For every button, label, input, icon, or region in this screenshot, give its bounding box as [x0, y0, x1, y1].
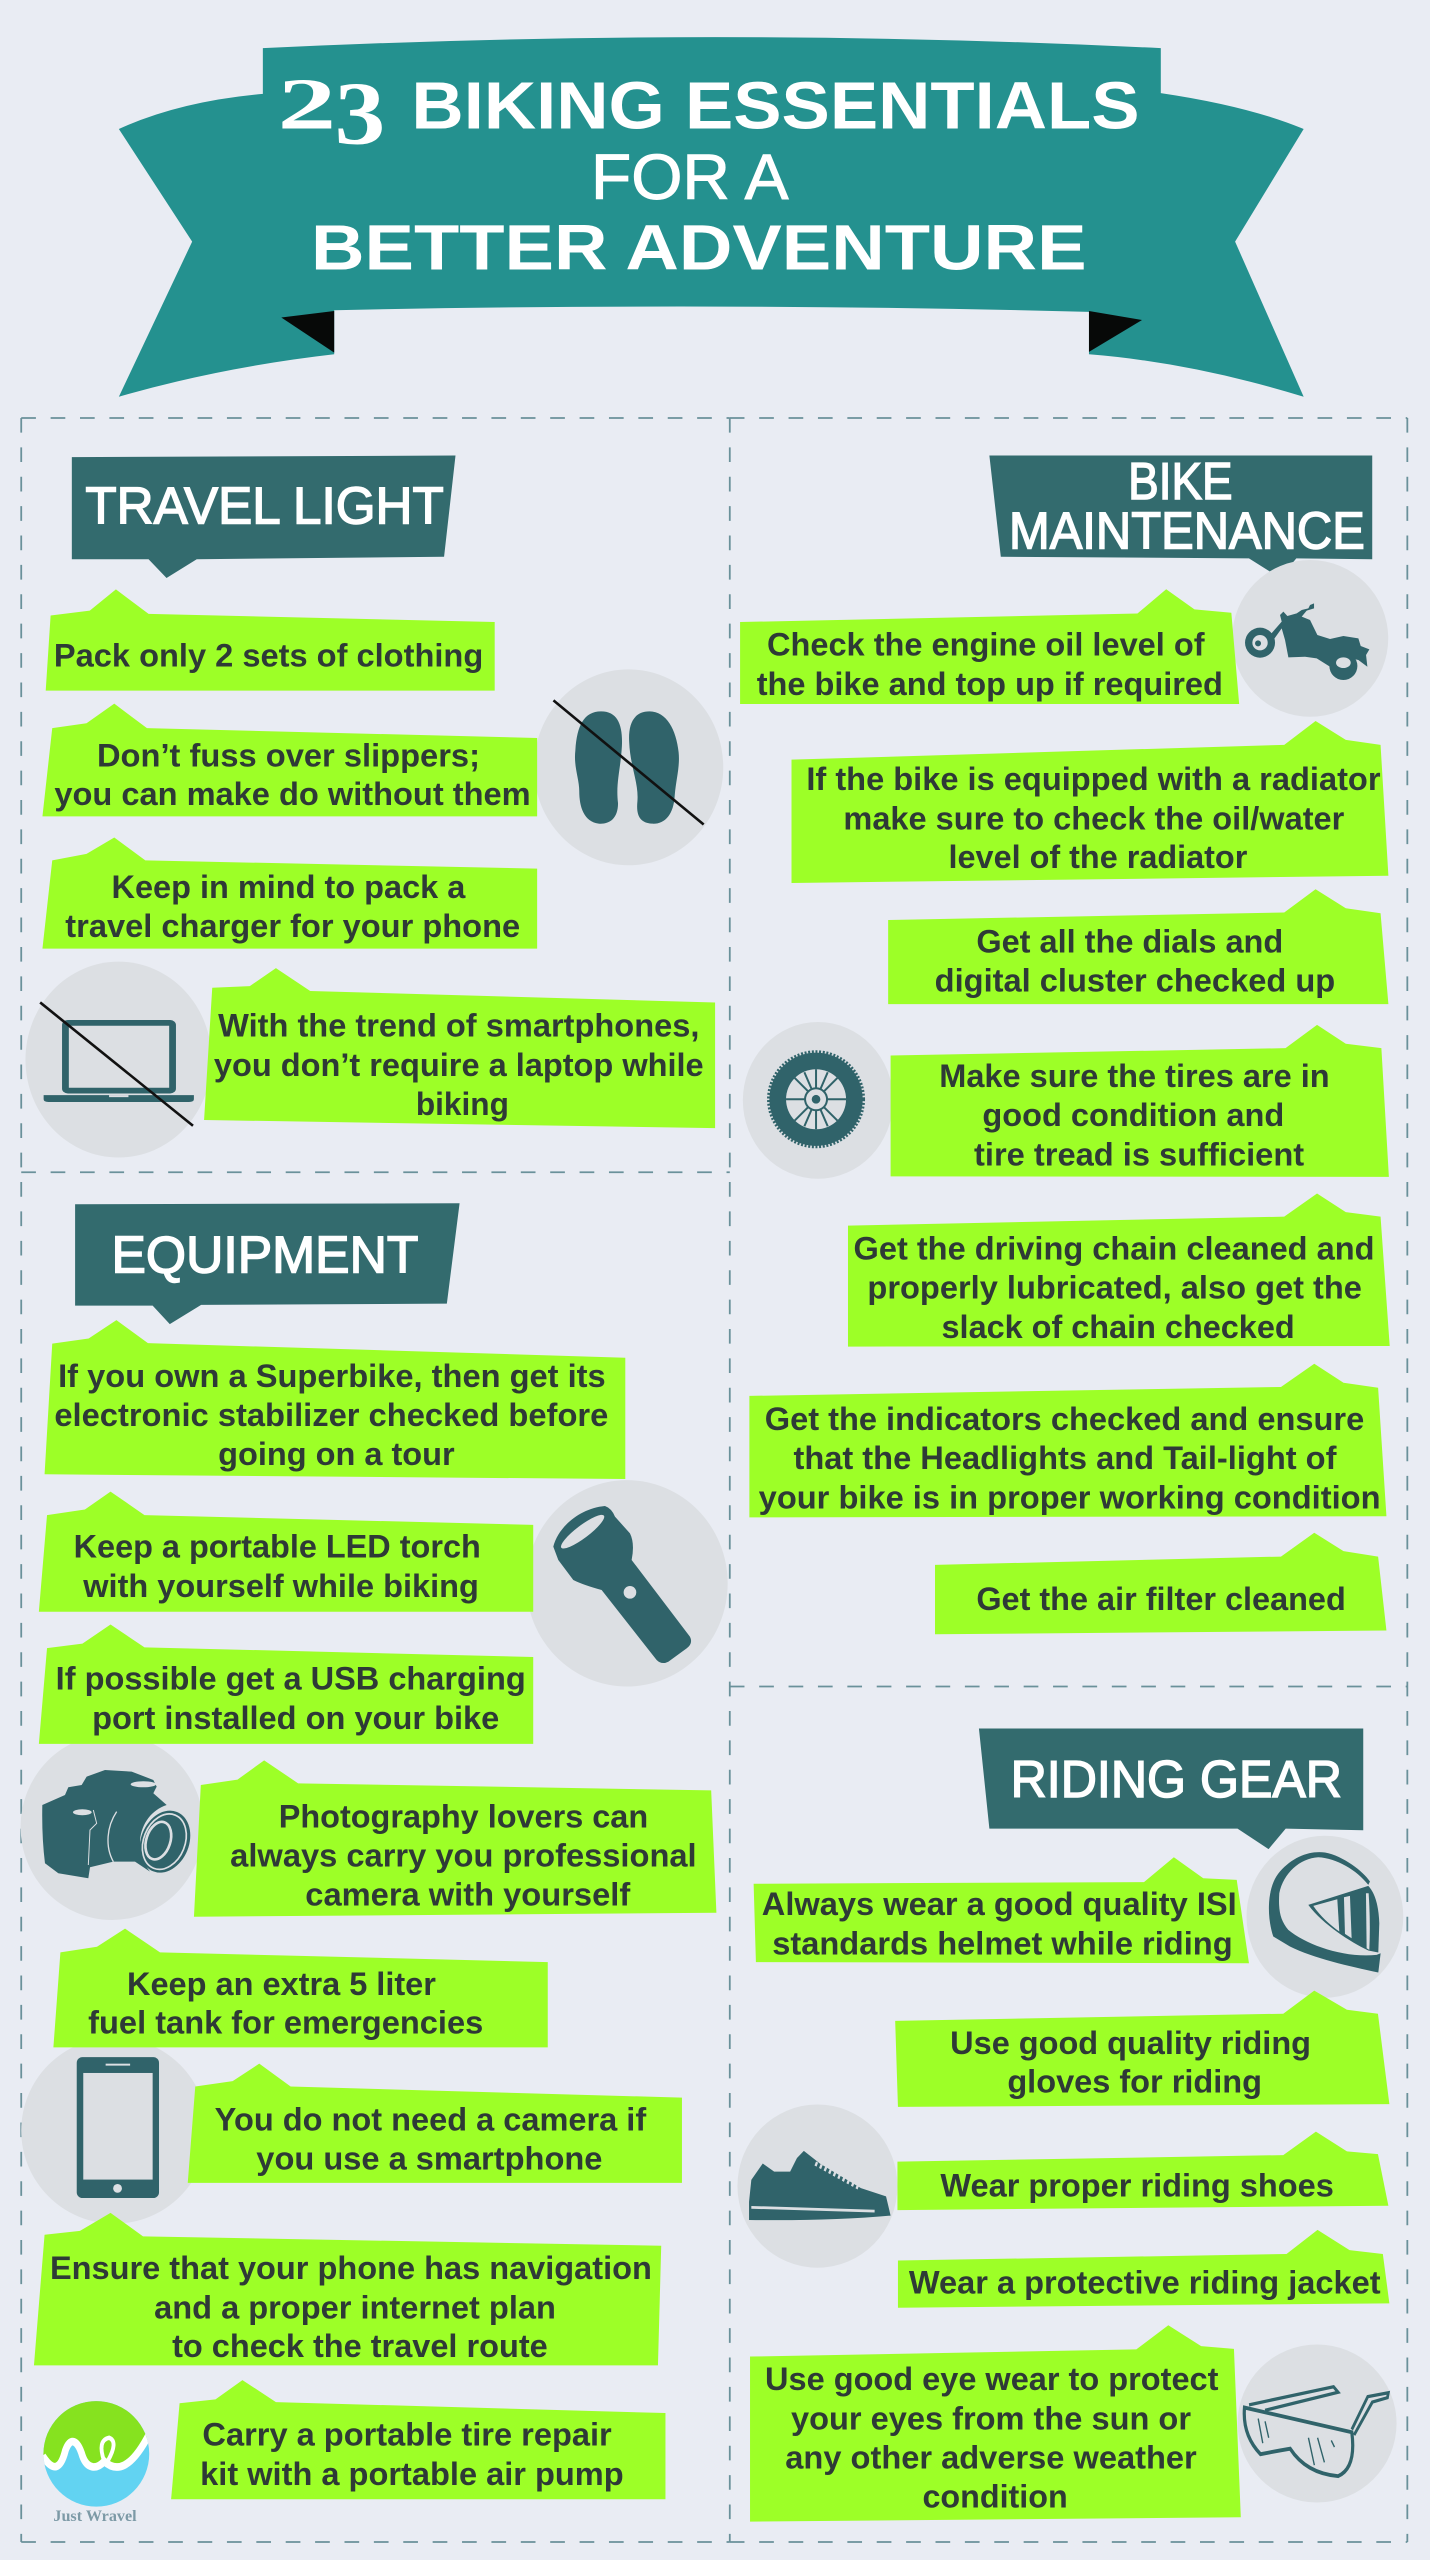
title text [278, 64, 1140, 283]
heading: riding gear [979, 1728, 1363, 1849]
item: fuel tank: fuel tank for emergencies [88, 2004, 483, 2040]
ribbon fold left [281, 311, 334, 353]
item: fuel tank: Keep an extra 5 liter [127, 1966, 436, 2002]
item: tires [891, 1025, 1389, 1177]
item: travel charger: Keep in mind to pack a [112, 869, 466, 905]
item: eye wear: your eyes from the sun or [791, 2400, 1191, 2436]
item: laptop: you don’t require a laptop while [214, 1047, 704, 1083]
item: dials: digital cluster checked up [935, 963, 1335, 999]
item: no camera needed [188, 2064, 682, 2183]
item: superbike: going on a tour [218, 1436, 455, 1472]
item: eye wear [750, 2325, 1241, 2522]
item: radiator [792, 721, 1388, 883]
title text: FOR A [591, 142, 789, 213]
item: eye wear: condition [922, 2479, 1068, 2515]
item: eye wear: any other adverse weather [785, 2440, 1197, 2476]
item: engine oil [740, 589, 1239, 704]
item: travel charger [42, 838, 537, 949]
heading: equipment: EQUIPMENT [112, 1226, 418, 1284]
icon: crossed-out laptop [25, 962, 212, 1158]
item: tire repair kit [171, 2380, 665, 2499]
icon: helmet [1247, 1836, 1403, 1998]
item: USB port [39, 1624, 533, 1744]
heading: travel light [72, 456, 456, 578]
item: chain: slack of chain checked [942, 1309, 1295, 1345]
item: jacket [898, 2230, 1389, 2308]
item: USB port: If possible get a USB charging [56, 1660, 526, 1696]
item: slippers [42, 704, 537, 816]
icon: goggles [1238, 2344, 1397, 2503]
item: travel charger: travel charger for your phone [65, 908, 520, 944]
banner ribbon [119, 37, 1304, 397]
item: navigation: to check the travel route [172, 2328, 548, 2364]
item: radiator: make sure to check the oil/water [843, 800, 1345, 836]
ribbon fold right [1089, 311, 1142, 352]
title text: 2 [278, 64, 336, 145]
panel: travel light [25, 456, 723, 1158]
item: navigation: Ensure that your phone has navigation [50, 2250, 652, 2286]
item: helmet [754, 1857, 1249, 1963]
item: tires: good condition and [982, 1097, 1284, 1133]
item: helmet: standards helmet while riding [772, 1925, 1233, 1961]
heading: bike maintenance [989, 453, 1372, 578]
item: chain [848, 1193, 1390, 1347]
item: dials: Get all the dials and [976, 923, 1283, 959]
item: USB port: port installed on your bike [92, 1700, 499, 1736]
heading: travel light: TRAVEL LIGHT [85, 477, 444, 535]
item: indicators: your bike is in proper working condition [759, 1479, 1381, 1515]
item: laptop: With the trend of smartphones, [218, 1008, 699, 1044]
panel: bike maintenance [740, 453, 1390, 1634]
heading: equipment [75, 1203, 460, 1324]
item: superbike: electronic stabilizer checked before [54, 1397, 608, 1433]
title text: BETTER ADVENTURE [311, 212, 1087, 283]
item: tires: tire tread is sufficient [974, 1137, 1304, 1173]
icon: shoe [737, 2104, 897, 2268]
item: laptop [204, 968, 715, 1128]
item: gloves: Use good quality riding [950, 2025, 1311, 2061]
panel: equipment [21, 1203, 728, 2525]
item: air filter [935, 1533, 1386, 1634]
item: LED torch [39, 1492, 533, 1612]
icon: wheel [743, 1022, 893, 1179]
icon: motorcycle [1232, 560, 1388, 717]
item: shoes [897, 2132, 1388, 2210]
item: dials [888, 889, 1388, 1004]
item: tire repair kit: Carry a portable tire repair [202, 2417, 612, 2453]
heading: bike maintenance: MAINTENANCE [1009, 503, 1365, 561]
item: tires: Make sure the tires are in [939, 1058, 1330, 1094]
item: gloves [895, 1991, 1389, 2107]
item: slippers: Don’t fuss over slippers; [97, 738, 480, 774]
item: shoes: Wear proper riding shoes [940, 2167, 1334, 2203]
item: photography: Photography lovers can [279, 1799, 648, 1835]
title banner [119, 37, 1304, 397]
item: LED torch: Keep a portable LED torch [74, 1528, 481, 1564]
item: engine oil: Check the engine oil level of [767, 627, 1205, 663]
item: indicators: Get the indicators checked and ensure [765, 1401, 1364, 1437]
item: chain: properly lubricated, also get the [867, 1269, 1362, 1305]
heading: riding gear: RIDING GEAR [1011, 1751, 1342, 1809]
logo: Just Wravel: Just Wravel [53, 2508, 137, 2525]
item: fuel tank [53, 1929, 548, 2047]
item: navigation [34, 2213, 661, 2365]
item: indicators [749, 1364, 1386, 1517]
icon: camera [21, 1734, 203, 1920]
title text: 3 [335, 65, 385, 164]
item: superbike: If you own a Superbike, then get its [58, 1358, 606, 1394]
item: radiator: If the bike is equipped with a radiator [806, 761, 1381, 797]
item: navigation: and a proper internet plan [154, 2290, 556, 2326]
item: superbike [45, 1320, 625, 1479]
item: air filter: Get the air filter cleaned [976, 1581, 1346, 1617]
item: engine oil: the bike and top up if required [757, 666, 1223, 702]
item: helmet: Always wear a good quality ISI [762, 1886, 1237, 1922]
item: jacket: Wear a protective riding jacket [909, 2265, 1381, 2301]
icon: crossed-out slippers [534, 669, 723, 865]
item: gloves: gloves for riding [1007, 2064, 1262, 2100]
item: clothing [46, 589, 495, 691]
icon: torch [526, 1480, 728, 1687]
heading: bike maintenance: BIKE [1128, 453, 1233, 511]
item: photography: camera with yourself [305, 1877, 630, 1913]
item: photography: always carry you professional [230, 1838, 697, 1874]
item: no camera needed: you use a smartphone [256, 2140, 602, 2176]
item: chain: Get the driving chain cleaned and [854, 1230, 1375, 1266]
item: tire repair kit: kit with a portable air pump [200, 2456, 624, 2492]
item: no camera needed: You do not need a camera if [215, 2102, 646, 2138]
item: radiator: level of the radiator [949, 839, 1248, 875]
item: photography [194, 1760, 716, 1917]
icon: smartphone [21, 2038, 207, 2224]
item: clothing: Pack only 2 sets of clothing [54, 637, 483, 673]
item: laptop: biking [416, 1086, 509, 1122]
item: indicators: that the Headlights and Tail-light of [793, 1440, 1337, 1476]
item: slippers: you can make do without them [54, 776, 531, 812]
logo: Just Wravel [43, 2401, 150, 2521]
title text: BIKING ESSENTIALS [411, 69, 1140, 144]
panel: riding gear [737, 1728, 1403, 2522]
item: LED torch: with yourself while biking [82, 1568, 479, 1604]
item: eye wear: Use good eye wear to protect [765, 2361, 1219, 2397]
